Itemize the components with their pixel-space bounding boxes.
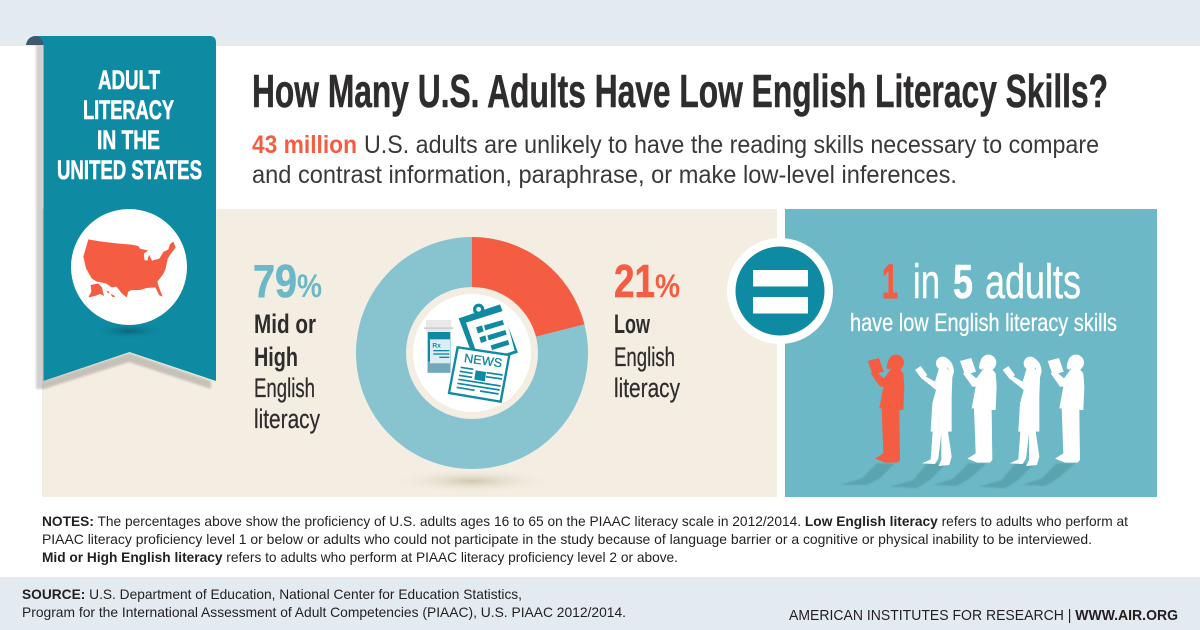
notes: Mid or High English literacy refers to adults who perform at PIAAC literacy proficiency level 2 or above. <box>42 549 678 565</box>
ribbon heading: ADULT <box>98 65 160 95</box>
stat: 79 percent mid or high: Mid or <box>254 309 316 339</box>
shadows <box>840 463 1075 488</box>
subheading: have low English literacy skills <box>850 309 1117 337</box>
person: man <box>1048 355 1084 463</box>
source: Program for the International Assessment of Adult Competencies (PIAAC), U.S. PIAAC 2012/2014. <box>22 604 626 620</box>
top band <box>0 0 1200 46</box>
stat: 21 percent low: % <box>655 268 680 304</box>
source <box>22 586 626 620</box>
ribbon heading <box>57 65 202 185</box>
stat: 79 percent mid or high: High <box>254 342 298 372</box>
stat: 79 percent mid or high: English <box>254 373 315 403</box>
heading: 1 in 5 adults: in <box>913 256 940 309</box>
stat: 79 percent mid or high: % <box>297 268 322 304</box>
footer band <box>0 577 1200 630</box>
panel: beige donut background <box>42 209 777 497</box>
panel: teal 1 in 5 background <box>785 209 1157 497</box>
stat: 79 percent mid or high: 79 <box>253 255 297 307</box>
stat: 21 percent low: English <box>614 342 675 372</box>
notes: NOTES: The percentages above show the proficiency of U.S. adults ages 16 to 65 on the PIAAC literacy scale in 2012/2014. Low English literacy refers to adults who perform at <box>42 513 1128 529</box>
person: orange man <box>868 355 904 463</box>
ribbon heading: UNITED STATES <box>57 155 202 185</box>
stat: 21 percent low <box>614 255 680 403</box>
notes <box>42 513 1128 565</box>
stat: 79 percent mid or high <box>253 255 322 434</box>
source: SOURCE: U.S. Department of Education, National Center for Education Statistics, <box>22 586 522 602</box>
icons: medicine bottle, clipboard, newspaper <box>424 304 518 403</box>
ribbon heading: IN THE <box>97 125 160 155</box>
subtitle <box>252 131 1099 189</box>
icon: equals sign <box>727 238 833 344</box>
ribbon circle shadow <box>91 323 167 339</box>
subtitle: and contrast information, paraphrase, or make low-level inferences. <box>252 161 957 189</box>
heading: 1 in 5 adults <box>882 256 1081 309</box>
stat: 21 percent low: literacy <box>614 373 680 403</box>
icon: clipboard <box>459 304 518 367</box>
people silhouettes <box>840 355 1084 488</box>
icon: medicine bottle: Rx <box>432 343 441 350</box>
person: woman <box>915 357 954 466</box>
donut chart <box>356 237 588 469</box>
subtitle: U.S. adults are unlikely to have the reading skills necessary to compare <box>364 131 1099 159</box>
heading: 1 in 5 adults: adults <box>985 256 1081 309</box>
donut shadow <box>392 469 552 493</box>
person: man <box>960 355 997 463</box>
notes: PIAAC literacy proficiency level 1 or below or adults who could not participate in the study because of language barrier or a cognitive or physical inability to be interviewed. <box>42 531 1092 547</box>
icon: map of the United States <box>71 209 187 325</box>
heading: 1 in 5 adults: 5 <box>953 256 973 309</box>
person: woman <box>1003 357 1042 466</box>
ribbon heading: LITERACY <box>83 95 174 125</box>
stat: 79 percent mid or high: literacy <box>254 404 320 434</box>
stat: 21 percent low: Low <box>614 309 651 339</box>
subtitle: 43 million <box>252 131 357 159</box>
organization credit: AMERICAN INSTITUTES FOR RESEARCH | WWW.AIR.ORG <box>789 607 1178 624</box>
icon: newspaper: NEWS <box>463 351 503 370</box>
heading: 1 in 5 adults: 1 <box>882 256 898 309</box>
stat: 21 percent low: 21 <box>614 255 655 307</box>
ribbon banner <box>26 36 216 389</box>
